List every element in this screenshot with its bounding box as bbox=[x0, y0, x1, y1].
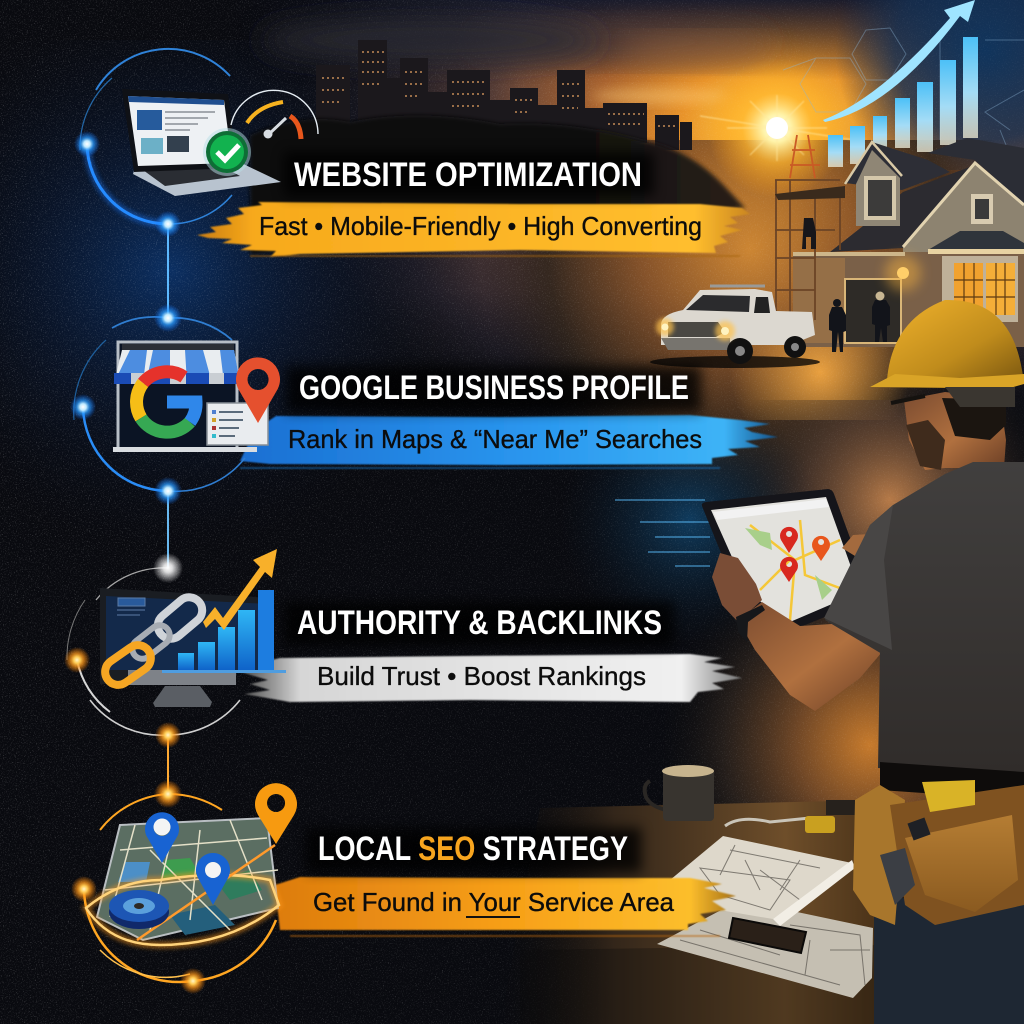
storefront bbox=[113, 342, 257, 452]
table bbox=[500, 800, 880, 1024]
speed gauge bbox=[231, 90, 318, 139]
map pin blue 2 bbox=[196, 853, 230, 905]
title: website optimization: WEBSITE OPTIMIZATION bbox=[294, 156, 642, 194]
skyline bbox=[316, 40, 692, 150]
map bbox=[97, 818, 278, 940]
worker bbox=[712, 300, 1024, 1024]
left hand bbox=[712, 553, 762, 622]
subtitle: local seo strategy: Get Found in Your Service Area bbox=[313, 887, 675, 917]
brush stroke: yellow bbox=[197, 202, 750, 257]
neck and face bbox=[904, 392, 1006, 470]
ring 4 bbox=[71, 780, 276, 994]
hair bbox=[942, 398, 1006, 440]
service area outline bbox=[86, 845, 279, 945]
map pin blue 1 bbox=[145, 812, 179, 863]
belt bbox=[880, 762, 1024, 800]
glasses bbox=[891, 396, 925, 403]
tape measure and tools bbox=[725, 800, 861, 833]
step connector lines bbox=[167, 224, 169, 794]
sun bbox=[700, 58, 854, 198]
tablet with map bbox=[702, 489, 872, 631]
subtitle: website optimization: Fast • Mobile-Friendly • High Converting bbox=[259, 211, 702, 241]
bar chart bbox=[162, 590, 286, 673]
map pin red bbox=[236, 357, 280, 423]
coffee mug bbox=[645, 765, 714, 821]
listing card bbox=[207, 403, 268, 445]
jeans bbox=[874, 890, 1024, 1024]
growth chart overlay bbox=[783, 0, 1024, 190]
subtitle: authority and backlinks: Build Trust • Boost Rankings bbox=[317, 661, 646, 691]
ring 1 bbox=[74, 49, 232, 237]
blueprints bbox=[657, 836, 873, 998]
hard hat bbox=[870, 300, 1024, 407]
pickup truck bbox=[650, 286, 820, 368]
google G bbox=[137, 372, 196, 432]
smartphone on table bbox=[729, 918, 806, 953]
step 2: google business profile icon bbox=[70, 304, 280, 505]
ground crew bbox=[829, 292, 890, 352]
check badge bbox=[203, 128, 251, 176]
brush stroke: blue bbox=[240, 415, 778, 468]
brush stroke: orange bbox=[275, 877, 736, 936]
ring 3 bbox=[64, 553, 240, 748]
tool pouch bbox=[853, 780, 1024, 925]
target disc bbox=[109, 890, 169, 929]
forearm bbox=[738, 602, 882, 711]
house bbox=[793, 138, 1024, 347]
treeline bbox=[250, 115, 745, 255]
beard bbox=[906, 420, 945, 470]
laptop bbox=[122, 89, 281, 196]
growth arrow bbox=[203, 549, 277, 630]
title: authority and backlinks: AUTHORITY & BACKLINKS bbox=[297, 604, 662, 642]
scaffold bbox=[775, 135, 845, 320]
right hand bbox=[842, 534, 870, 556]
chain links bbox=[100, 592, 208, 690]
title: google business profile: GOOGLE BUSINESS PROFILE bbox=[299, 369, 689, 407]
shirt bbox=[825, 462, 1024, 775]
brush stroke: white bbox=[240, 654, 742, 702]
monitor bbox=[100, 588, 272, 707]
roof worker bbox=[802, 218, 816, 249]
ring 2 bbox=[70, 304, 245, 505]
watch bbox=[736, 605, 765, 642]
step 4: local seo strategy icon bbox=[71, 780, 297, 994]
heading shadows bbox=[284, 152, 701, 872]
step 1: website optimization icon bbox=[74, 49, 318, 237]
map pin orange bbox=[255, 783, 297, 844]
step 3: authority and backlinks icon bbox=[64, 549, 286, 748]
subtitle: google business profile: Rank in Maps & “Near Me” Searches bbox=[288, 424, 702, 454]
title: local seo strategy: LOCAL SEO STRATEGY bbox=[318, 830, 628, 868]
